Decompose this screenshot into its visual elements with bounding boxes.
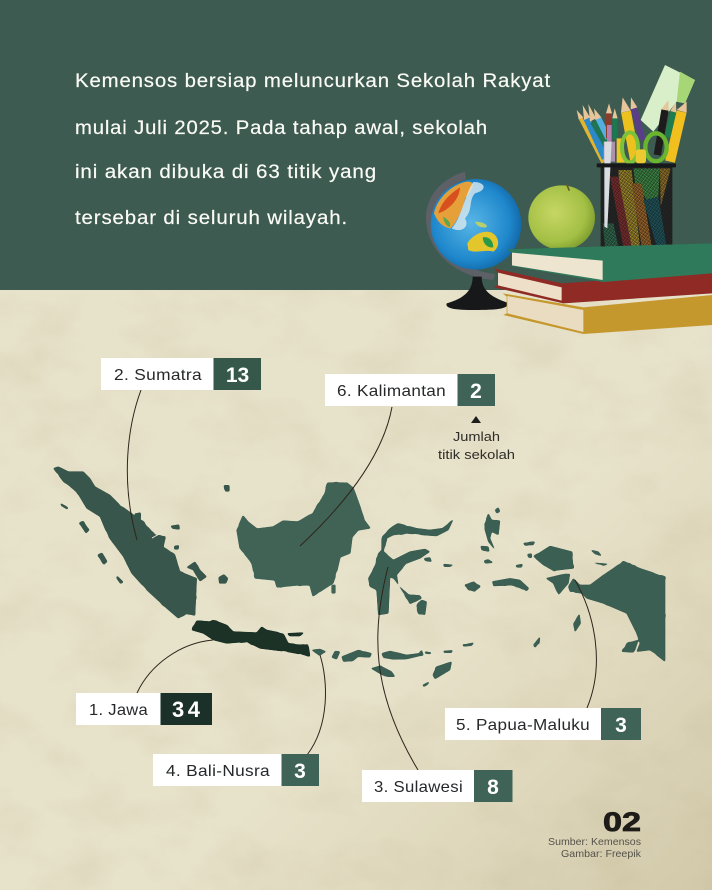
intro text: mulai Juli 2025. Pada tahap awal, sekolah bbox=[75, 118, 488, 139]
label: Bali-Nusra bbox=[153, 754, 319, 786]
connector: Jawa bbox=[137, 640, 213, 693]
header panel bbox=[0, 0, 712, 290]
label: Bali-Nusra: 4. Bali-Nusra bbox=[166, 763, 270, 780]
map region: Kalimantan bbox=[237, 483, 370, 596]
intro text: Kemensos bersiap meluncurkan Sekolah Rakyat bbox=[75, 71, 551, 92]
map of Indonesia bbox=[53, 467, 665, 687]
map detail: Riau inlets bbox=[144, 520, 164, 538]
intro text: ini akan dibuka di 63 titik yang bbox=[75, 162, 377, 183]
legend note: jumlah titik sekolah: Jumlah bbox=[453, 430, 500, 444]
map region: Sulawesi bbox=[368, 519, 453, 615]
connector: Bali-Nusra bbox=[307, 655, 326, 755]
connector: Kalimantan bbox=[300, 407, 392, 546]
label: Jawa bbox=[76, 693, 212, 725]
label: Jawa: 34 bbox=[172, 697, 201, 722]
paper background bbox=[0, 290, 712, 890]
label: Papua-Maluku: 3 bbox=[615, 714, 627, 737]
source credit bbox=[548, 836, 642, 860]
school supplies illustration bbox=[426, 65, 712, 334]
page number: 02 bbox=[603, 807, 641, 837]
label: Sulawesi bbox=[362, 770, 512, 802]
label: Bali-Nusra: 3 bbox=[294, 760, 306, 783]
label: Sumatra: 13 bbox=[226, 364, 249, 387]
icon: pencils and scissors bbox=[577, 65, 695, 163]
legend note: jumlah titik sekolah: titik sekolah bbox=[438, 448, 515, 462]
map region: Jawa bbox=[192, 620, 310, 656]
source credit: Gambar: Freepik bbox=[561, 848, 642, 860]
map region: Bali-Nusra bbox=[312, 643, 474, 687]
label: Sumatra: 2. Sumatra bbox=[114, 367, 202, 384]
legend note: jumlah titik sekolah bbox=[438, 416, 515, 462]
map region: Papua-Maluku bbox=[443, 507, 665, 662]
intro text: tersebar di seluruh wilayah. bbox=[75, 208, 348, 229]
intro text bbox=[75, 71, 551, 229]
label: Kalimantan: 2 bbox=[470, 380, 482, 403]
connector: Sumatra bbox=[127, 390, 141, 540]
icon: stacked books bbox=[494, 243, 712, 334]
icon: apple bbox=[528, 184, 595, 250]
label: Jawa: 1. Jawa bbox=[89, 702, 148, 719]
label: Sumatra bbox=[101, 358, 261, 390]
label: Sulawesi: 3. Sulawesi bbox=[374, 779, 463, 796]
map region: Sumatra bbox=[53, 467, 229, 618]
icon: globe bbox=[426, 172, 521, 310]
label: Sulawesi: 8 bbox=[487, 776, 499, 799]
connector: Sulawesi bbox=[378, 567, 418, 770]
label: Kalimantan: 6. Kalimantan bbox=[337, 383, 446, 400]
label: Kalimantan bbox=[325, 374, 495, 406]
icon: mesh pencil holder bbox=[597, 142, 676, 252]
connector: Papua-Maluku bbox=[575, 580, 596, 708]
source credit: Sumber: Kemensos bbox=[548, 836, 641, 848]
label: Papua-Maluku bbox=[445, 708, 641, 740]
label: Papua-Maluku: 5. Papua-Maluku bbox=[456, 717, 590, 734]
